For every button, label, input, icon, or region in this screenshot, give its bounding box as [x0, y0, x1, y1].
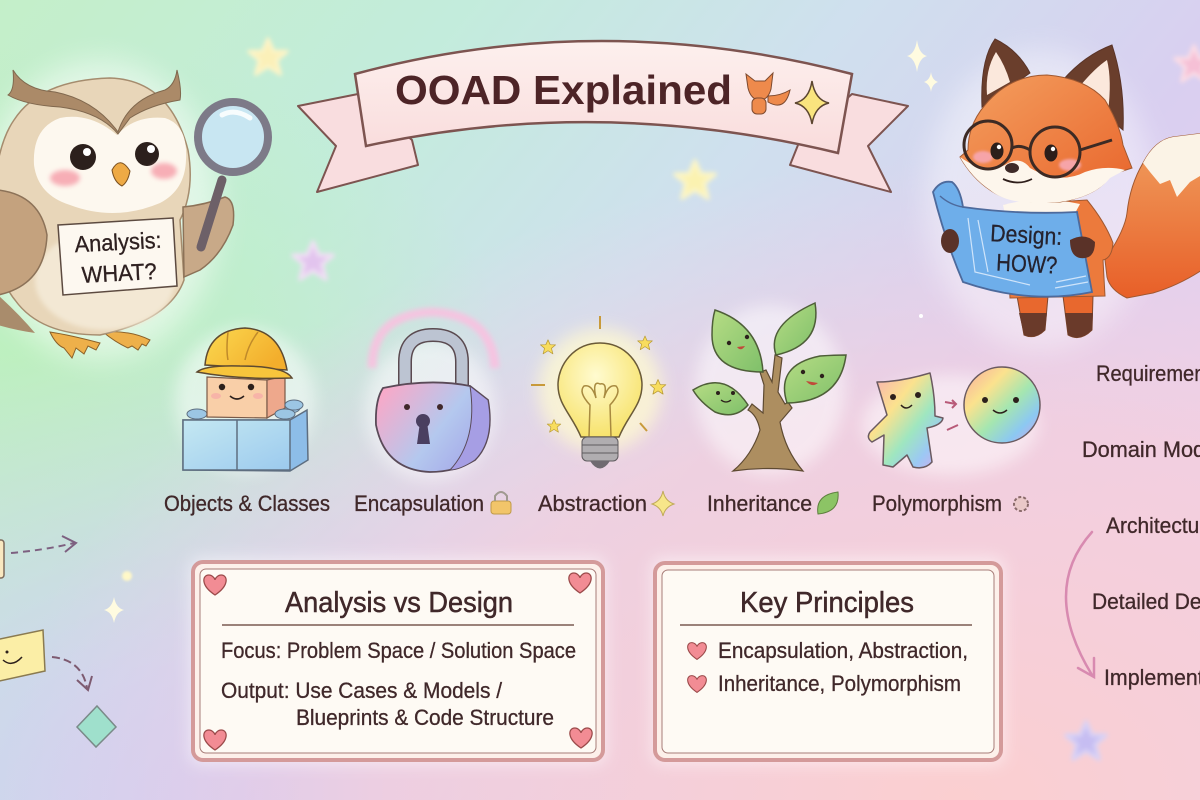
hearts	[688, 643, 706, 692]
feet	[50, 332, 100, 358]
icon: lego block with helmet	[183, 328, 308, 471]
box: cut off	[0, 540, 4, 578]
body text	[718, 638, 968, 696]
blush	[973, 151, 993, 163]
blueprint: Design:	[990, 220, 1063, 251]
sign: Analysis WHAT: Analysis:	[74, 227, 162, 257]
title banner	[298, 41, 908, 192]
sign: Analysis WHAT	[58, 218, 177, 295]
tail	[1105, 133, 1200, 298]
label: Inheritance: Inheritance	[707, 491, 812, 516]
hearts	[204, 573, 592, 750]
body text: Encapsulation, Abstraction,	[718, 638, 968, 663]
icon: mini flower	[1014, 497, 1028, 511]
legs	[1017, 296, 1093, 338]
left ribbon tail	[298, 94, 418, 192]
magnifier handle	[201, 180, 222, 247]
belly	[35, 230, 175, 330]
arrow: dashed right	[11, 543, 74, 553]
body	[1005, 200, 1113, 298]
body text: Output: Use Cases & Models /	[221, 678, 503, 703]
lower wing	[0, 295, 35, 333]
glasses	[964, 121, 1112, 177]
icon: sparkle	[795, 81, 829, 124]
right ribbon tail	[790, 94, 908, 192]
label: Encapsulation: Encapsulation	[354, 491, 484, 516]
icon: padlock	[372, 312, 495, 472]
brow and ear tufts	[8, 70, 181, 134]
body text: Inheritance, Polymorphism	[718, 671, 961, 696]
label: Objects & Classes: Objects & Classes	[164, 491, 330, 516]
body	[0, 78, 190, 335]
glows	[175, 305, 1038, 480]
heading: Key Principles	[740, 587, 914, 619]
face	[34, 117, 186, 213]
left flow fragment	[0, 536, 116, 747]
eyes	[70, 144, 96, 170]
icon: tree with leaves	[693, 303, 846, 471]
paws	[941, 229, 959, 253]
eyes	[990, 142, 1004, 160]
right process list	[1066, 361, 1200, 690]
head	[960, 75, 1132, 202]
panel: Analysis vs Design	[190, 558, 606, 764]
right wing	[183, 197, 234, 277]
panel: Key Principles	[652, 558, 1004, 764]
heading: Analysis vs Design	[285, 587, 513, 619]
body text	[221, 638, 576, 730]
icon: small fox	[746, 73, 790, 114]
body text: Focus: Problem Space / Solution Space	[221, 638, 576, 663]
blueprint: HOW?	[996, 249, 1058, 280]
arrow: process flow	[1066, 532, 1094, 677]
icon: light bulb	[531, 316, 666, 468]
title: OOAD Explained	[395, 67, 732, 113]
sticky note	[0, 630, 45, 682]
body text: Blueprints & Code Structure	[296, 705, 554, 730]
nose and mouth	[1005, 163, 1019, 173]
white lower face	[960, 157, 1125, 203]
concept labels	[164, 491, 1028, 516]
fox character	[925, 39, 1200, 350]
blueprint	[933, 182, 1092, 297]
diamond	[77, 706, 116, 747]
tail tip	[1143, 133, 1200, 197]
icon: mini leaf	[818, 492, 838, 514]
label: Polymorphism: Polymorphism	[872, 491, 1002, 516]
banner body	[355, 41, 852, 153]
magnifier lens	[198, 102, 268, 172]
beak	[112, 163, 130, 186]
icon: mini lock	[491, 492, 511, 514]
blush	[50, 170, 80, 186]
glow	[0, 60, 220, 360]
label: Abstraction: Abstraction	[538, 491, 647, 516]
icon: mini sparkle	[652, 491, 674, 516]
ears	[982, 39, 1030, 107]
panel: concept icons row	[175, 303, 1040, 480]
glow	[925, 50, 1155, 350]
arrow: dashed curve	[52, 657, 87, 688]
left wing	[0, 190, 47, 295]
sign: Analysis WHAT: WHAT?	[81, 258, 157, 288]
owl character	[0, 60, 268, 360]
icon: shape morph to circle	[868, 367, 1040, 468]
